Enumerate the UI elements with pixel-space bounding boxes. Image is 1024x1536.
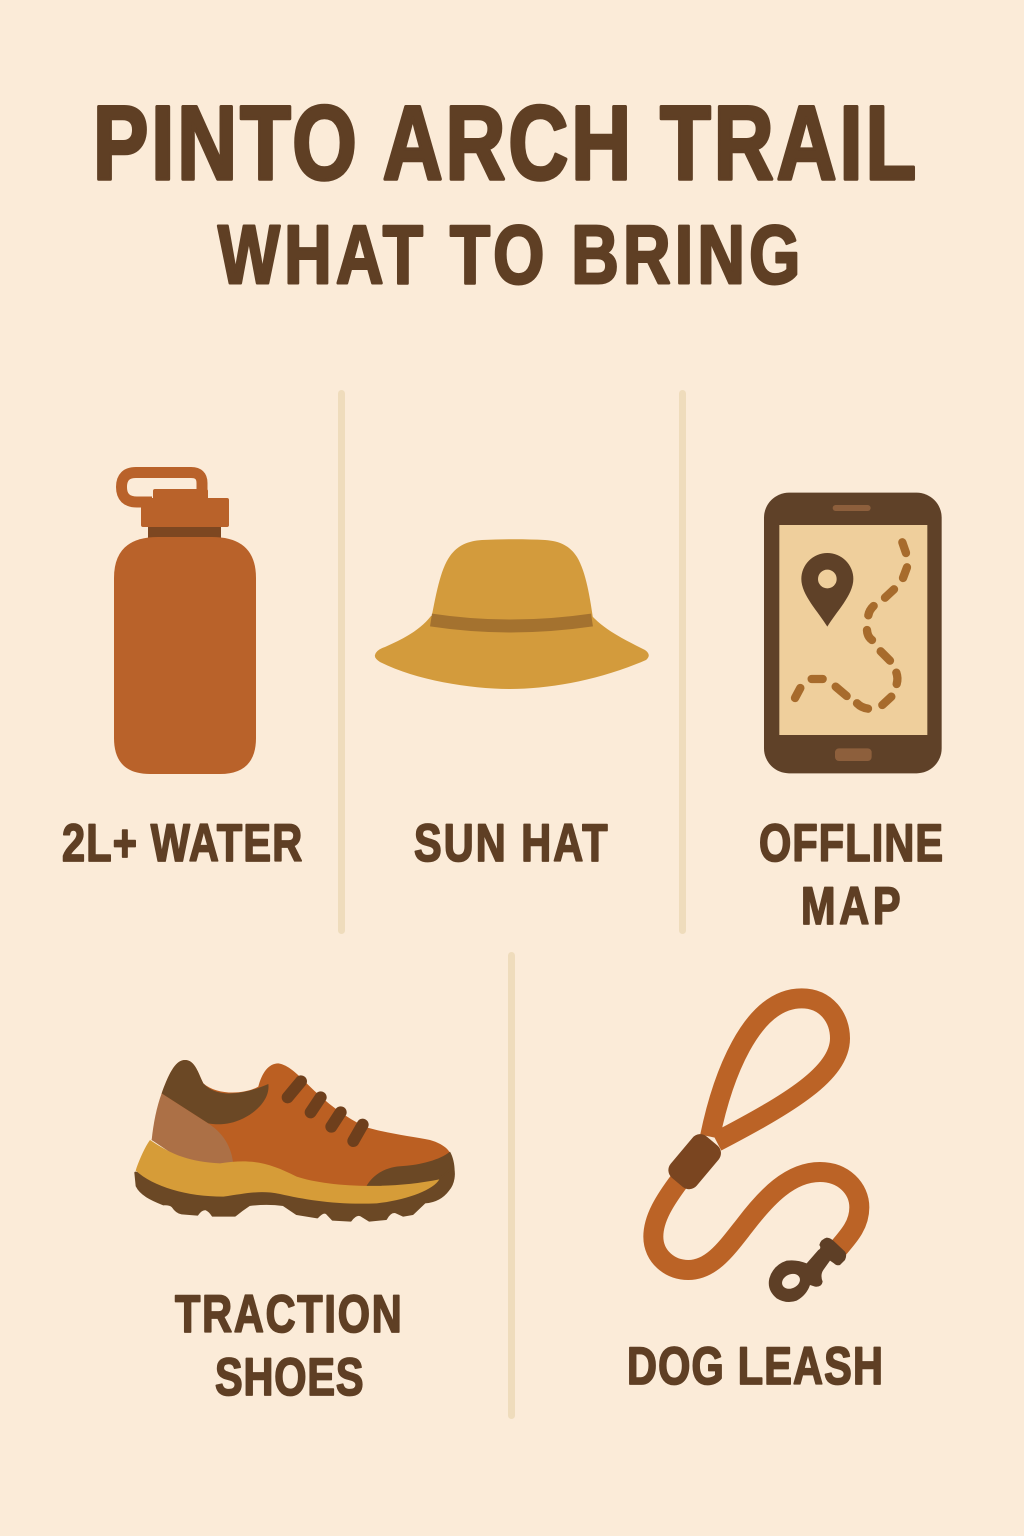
label: traction shoes: TRACTION (175, 1285, 402, 1344)
icon: phone with map (764, 493, 942, 773)
label: offline map (759, 814, 943, 936)
panel: traction shoes (135, 1060, 455, 1407)
icon: water bottle (114, 472, 256, 774)
label: water: 2L+ WATER (62, 814, 302, 873)
subtitle: WHAT TO BRING (218, 208, 800, 301)
title: PINTO ARCH TRAIL (93, 85, 916, 202)
label: offline map: OFFLINE (759, 814, 943, 873)
panel: offline map (759, 493, 943, 936)
label: traction shoes (175, 1285, 402, 1407)
icon: hiking shoe (135, 1060, 455, 1221)
panel: dog leash (627, 998, 883, 1396)
label: dog leash: DOG LEASH (627, 1337, 883, 1396)
label: offline map: MAP (801, 877, 901, 936)
panel: water (62, 472, 302, 873)
panel: sun hat (375, 539, 649, 873)
label: traction shoes: SHOES (215, 1348, 364, 1407)
icon: sun hat (375, 539, 649, 689)
label: sun hat: SUN HAT (414, 814, 608, 873)
icon: dog leash (653, 998, 859, 1302)
